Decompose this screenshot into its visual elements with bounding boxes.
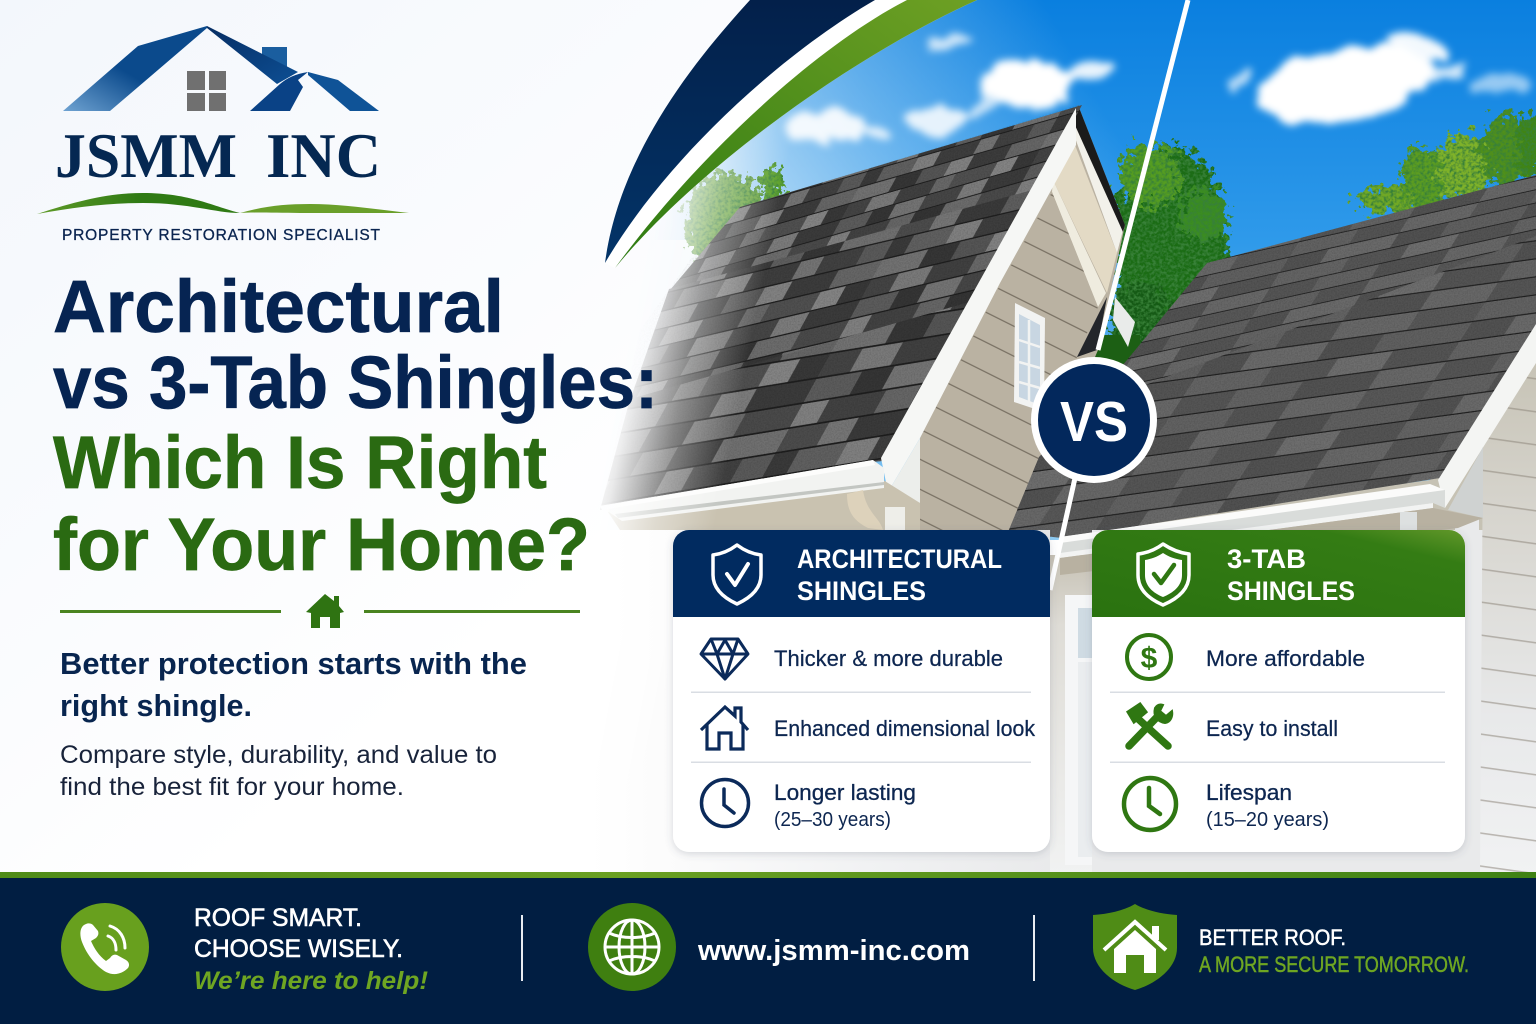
feature text: (15–20 years) [1206, 809, 1329, 831]
panel: architectural shingles [673, 530, 1050, 852]
company name: JSMM [55, 121, 237, 191]
right roof shingles [1008, 175, 1536, 538]
card heading: 3-TAB [1227, 544, 1306, 574]
icon: clock [702, 780, 748, 826]
logo [37, 26, 409, 244]
title: vs 3-Tab Shingles: [53, 341, 658, 424]
feature text: Easy to install [1206, 716, 1338, 741]
card header [673, 530, 1050, 617]
title: Architectural [53, 265, 504, 348]
icon: diamond [701, 639, 748, 679]
card heading [797, 544, 1002, 606]
card heading: SHINGLES [1227, 576, 1355, 606]
company name: INC [266, 121, 381, 191]
card heading: ARCHITECTURAL [797, 544, 1002, 574]
left roof shingles [600, 105, 1082, 510]
card heading: SHINGLES [797, 576, 926, 606]
panel: 3-tab shingles [1092, 530, 1465, 852]
icon: house roof logo [63, 26, 379, 111]
feature text [774, 780, 916, 831]
navy and green swoosh [605, 0, 977, 268]
icon: phone [61, 903, 149, 991]
trees behind the roofs [685, 111, 1536, 360]
contact message [194, 904, 428, 995]
left white bargeboard and gutter [600, 108, 1076, 545]
title [53, 265, 658, 586]
clouds [788, 27, 1530, 146]
contact message: ROOF SMART. [194, 904, 362, 932]
green divider with house icon [60, 594, 580, 628]
feature text [1206, 780, 1329, 831]
window frame between cards [1065, 595, 1092, 865]
contact message: CHOOSE WISELY. [194, 935, 403, 963]
icon: home shield [1093, 904, 1177, 990]
feature text: (25–30 years) [774, 809, 891, 831]
tagline: PROPERTY RESTORATION SPECIALIST [62, 227, 381, 244]
card header [1092, 530, 1465, 617]
website: www.jsmm-inc.com [697, 935, 970, 967]
feature text: Enhanced dimensional look [774, 716, 1036, 741]
foliage filling behind VS badge [1095, 335, 1140, 364]
left gable window [1014, 303, 1045, 412]
right house wall with siding [1455, 352, 1536, 874]
icon: house outline [701, 707, 748, 749]
slogan: BETTER ROOF. [1199, 925, 1346, 950]
icon: dollar coin: $ [1141, 642, 1158, 675]
right bargeboard and gutter [1060, 324, 1536, 575]
card heading [1227, 544, 1355, 606]
divider line between roofs [1050, 0, 1188, 590]
subtitle: right shingle. [60, 688, 252, 723]
photo scene: two roofs under blue sky [590, 0, 1536, 875]
feature text: Longer lasting [774, 780, 916, 805]
slogan [1199, 925, 1469, 977]
supporting text: find the best fit for your home. [60, 773, 404, 801]
feature text: Thicker & more durable [774, 646, 1003, 671]
subtitle: Better protection starts with the [60, 646, 527, 681]
icon: globe [588, 903, 676, 991]
green hill swoosh [37, 193, 409, 214]
right house underlay [1138, 449, 1482, 530]
icon: dollar coin [1127, 635, 1171, 679]
icon: shield check [1138, 544, 1189, 605]
lower wash below eaves [590, 530, 1536, 875]
VS badge: VS [1060, 390, 1128, 454]
title: Which Is Right [53, 421, 547, 504]
icon: clock [1124, 778, 1176, 830]
icon: shield check [713, 545, 761, 604]
footer band [0, 872, 1536, 1024]
supporting text [60, 741, 497, 801]
feature text: Lifespan [1206, 780, 1292, 805]
VS badge [1031, 357, 1157, 483]
icon: hammer and wrench [1128, 704, 1172, 746]
supporting text: Compare style, durability, and value to [60, 741, 497, 769]
left house gable wall [905, 105, 1135, 535]
slogan: A MORE SECURE TOMORROW. [1199, 952, 1469, 977]
subtitle [60, 646, 527, 723]
title: for Your Home? [53, 503, 590, 586]
feature text: More affordable [1206, 646, 1365, 671]
contact message: We’re here to help! [194, 967, 428, 995]
